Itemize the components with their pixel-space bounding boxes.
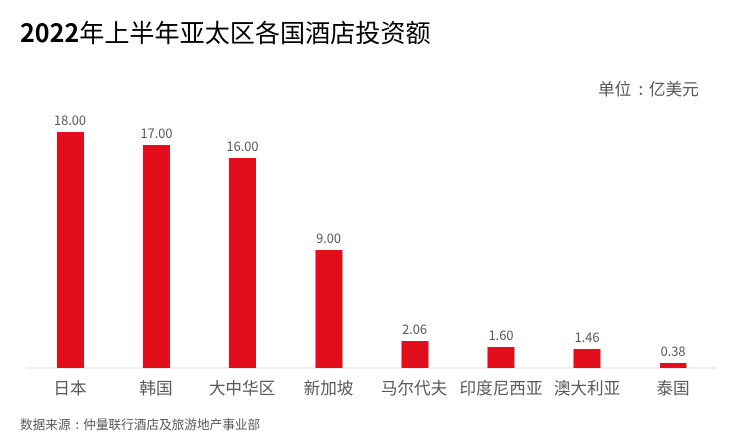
bar: 马尔代夫: 马尔代夫: [381, 375, 448, 399]
bar chart: [27, 110, 716, 399]
bar: 韩国: 17.00: [141, 123, 172, 142]
source note: :: [76, 414, 79, 433]
bar: 马尔代夫: [381, 319, 448, 399]
bar: 大中华区: 16.00: [227, 136, 258, 155]
bar: 澳大利亚: [554, 327, 620, 399]
bar: 马尔代夫: 2.06: [402, 319, 427, 338]
bar: 大中华区: 大中华区: [209, 375, 275, 399]
bar: 泰国: [656, 341, 690, 399]
unit label: 单位: [598, 76, 631, 100]
bar: 澳大利亚: 1.46: [575, 327, 599, 346]
bar: 印度尼西亚: 1.60: [489, 325, 513, 344]
bar: 日本: 18.00: [54, 110, 86, 129]
bar: 新加坡: [304, 228, 353, 399]
bar: 韩国: [139, 123, 173, 399]
bar: 泰国: 0.38: [661, 341, 685, 360]
unit label: :: [638, 76, 643, 100]
source note: 数据来源: [20, 414, 71, 433]
bar: 新加坡: 9.00: [316, 228, 341, 247]
title: 2022年上半年亚太区各国酒店投资额: [20, 14, 431, 50]
bar: 泰国: 泰国: [656, 375, 690, 399]
bar: 日本: [53, 110, 87, 399]
bar: 印度尼西亚: [460, 325, 542, 399]
bar: 新加坡: 新加坡: [304, 375, 353, 399]
bar: 大中华区: [209, 136, 275, 399]
bar: 日本: 日本: [53, 375, 87, 399]
source note: 仲量联行酒店及旅游地产事业部: [83, 414, 260, 433]
bar: 印度尼西亚: 印度尼西亚: [460, 375, 542, 399]
bar: 韩国: 韩国: [139, 375, 173, 399]
bar: 澳大利亚: 澳大利亚: [554, 375, 620, 399]
unit label: 亿美元: [649, 76, 699, 100]
